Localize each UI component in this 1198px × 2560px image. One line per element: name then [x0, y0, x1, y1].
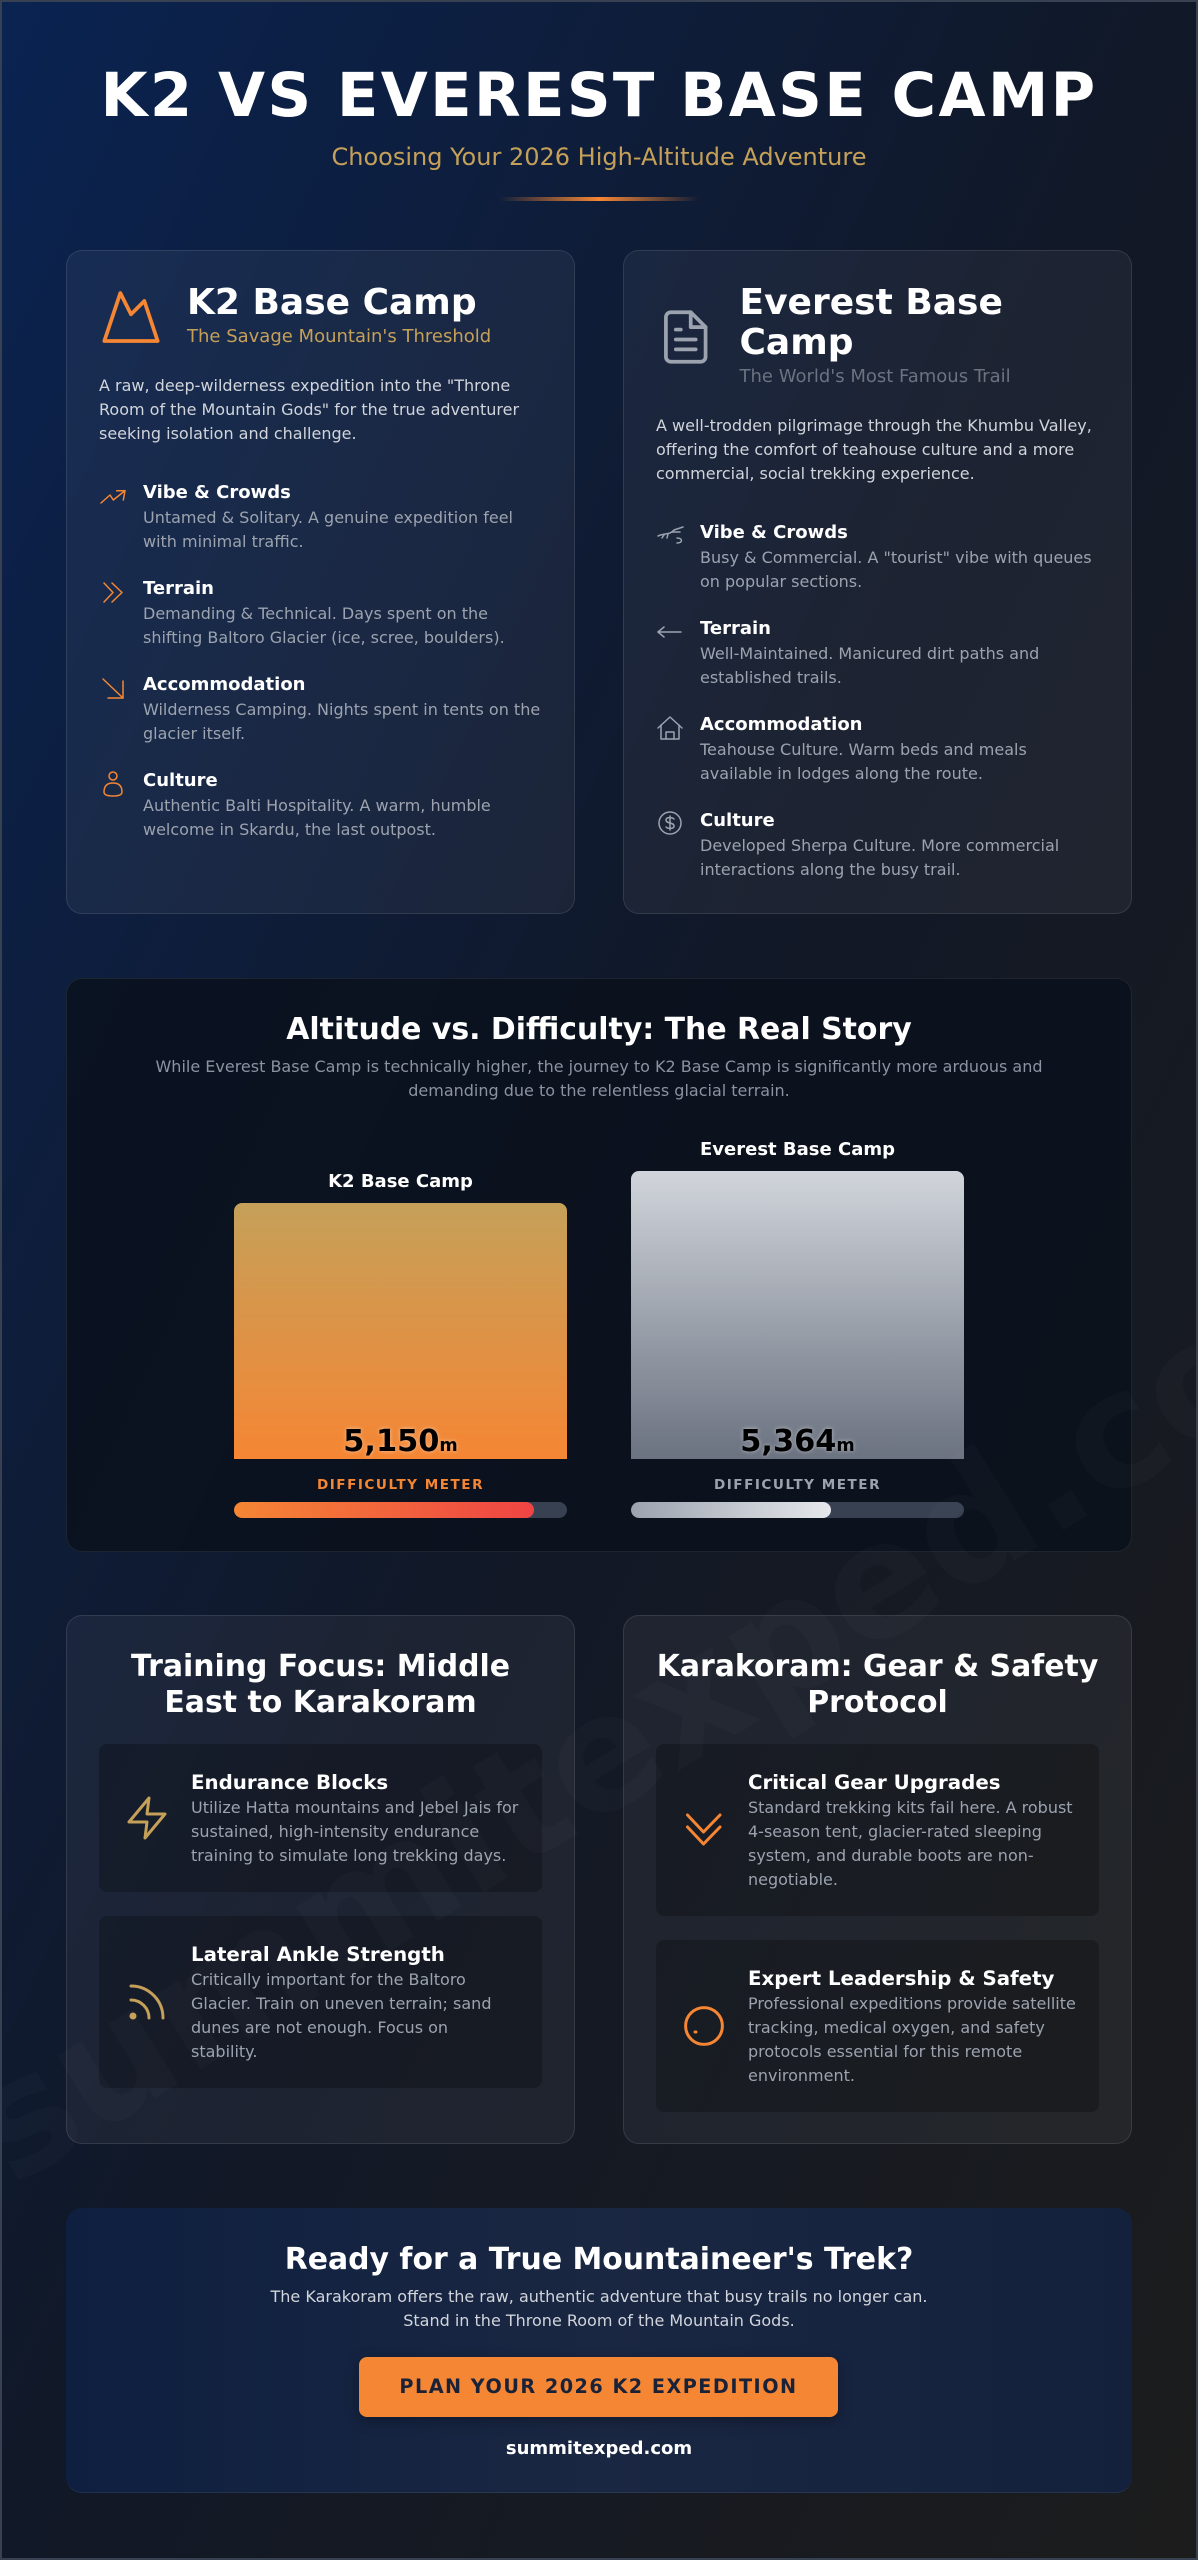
Everest card header — [664, 282, 1011, 387]
K2 item: culture — [103, 770, 491, 839]
icon: person — [103, 771, 123, 797]
Everest difficulty meter — [631, 1502, 964, 1518]
gear heading: Protocol — [807, 1684, 948, 1720]
K2 item: vibe and crowds: Vibe & Crowds — [143, 482, 291, 502]
K2 item: vibe and crowds: Untamed & Solitary. A genuine expedition feel with minimal traffic. — [143, 508, 513, 551]
icon: mountain — [102, 291, 160, 343]
panel: altitude vs difficulty — [66, 978, 1132, 1552]
Everest altitude value: 5,364m — [740, 1424, 855, 1459]
icon: house — [657, 716, 683, 740]
panel: K2 Base Camp card — [66, 250, 575, 914]
CTA button: PLAN YOUR 2026 K2 EXPEDITION — [399, 2375, 798, 2398]
chart: Everest altitude bar — [631, 1139, 964, 1518]
K2 difficulty label: DIFFICULTY METER — [317, 1476, 484, 1492]
icon: trending up — [100, 490, 126, 504]
CTA text: The Karakoram offers the raw, authentic adventure that busy trails no longer can. — [271, 2287, 927, 2306]
K2 bar — [234, 1203, 567, 1459]
panel: call to action — [66, 2208, 1132, 2493]
K2 item: vibe and crowds — [100, 482, 513, 551]
CTA heading: Ready for a True Mountaineer's Trek? — [285, 2242, 913, 2277]
section text: While Everest Base Camp is technically higher, the journey to K2 Base Camp is significantly more arduous and demanding due to the relentless glacial terrain. — [155, 1057, 1043, 1100]
block: leadership: Professional expeditions provide satellite tracking, medical oxygen, and safety protocols essential for this remote environment. — [748, 1994, 1076, 2085]
icon: circle with dot — [684, 2006, 724, 2046]
icon: document — [664, 310, 708, 364]
K2 item: accommodation: Wilderness Camping. Nights spent in tents on the glacier itself. — [143, 700, 540, 743]
block: endurance — [99, 1744, 542, 1892]
icon: dollar — [658, 811, 682, 835]
K2 item: terrain: Terrain — [143, 578, 214, 598]
Everest item: culture — [658, 810, 1059, 879]
block: ankle strength: stability. — [191, 2042, 257, 2061]
K2 item: accommodation — [102, 674, 540, 743]
header: title block — [100, 61, 1097, 201]
icon: arrow down right — [102, 678, 124, 699]
CTA text — [270, 2287, 927, 2330]
block: ankle strength — [99, 1916, 542, 2088]
panel: training focus — [66, 1615, 575, 2144]
icon: signal arcs — [130, 1984, 164, 2020]
website: summitexped.com — [506, 2438, 692, 2459]
gear heading — [657, 1648, 1098, 1720]
chart: K2 altitude bar — [234, 1171, 567, 1518]
K2 card header — [102, 282, 491, 347]
icon: double chevrons — [103, 582, 123, 603]
title: K2 VS EVEREST BASE CAMP — [100, 61, 1097, 131]
K2 bar label: K2 Base Camp — [328, 1171, 473, 1192]
Everest description: A well-trodden pilgrimage through the Khumbu Valley, offering the comfort of teahouse culture and a more commercial, social trekking experience. — [656, 416, 1092, 482]
block: endurance: Utilize Hatta mountains and Jebel Jais for sustained, high-intensity endurance training to simulate long trekking days. — [191, 1798, 518, 1865]
Everest item: accommodation — [657, 714, 1027, 783]
K2 item: culture: Culture — [143, 770, 218, 790]
Everest item: terrain: Well-Maintained. Manicured dirt paths and established trails. — [700, 644, 1039, 687]
block: endurance: Endurance Blocks — [191, 1770, 388, 1794]
block: leadership: Expert Leadership & Safety — [748, 1966, 1054, 1990]
K2 item: culture: Authentic Balti Hospitality. A warm, humble welcome in Skardu, the last outpost. — [143, 796, 491, 839]
K2 card title: The Savage Mountain's Threshold — [187, 326, 491, 347]
icon: lightning — [127, 1796, 167, 1840]
block: gear upgrades: Critical Gear Upgrades — [748, 1770, 1001, 1794]
subtitle: Choosing Your 2026 High-Altitude Adventure — [332, 143, 866, 171]
Everest card title: The World's Most Famous Trail — [740, 366, 1011, 387]
gear heading: Karakoram: Gear & Safety — [657, 1648, 1098, 1684]
K2 item: accommodation: Accommodation — [143, 674, 306, 694]
block: leadership — [656, 1940, 1099, 2112]
Everest item: accommodation: Teahouse Culture. Warm beds and meals available in lodges along the route. — [700, 740, 1027, 783]
icon: double chevron down — [686, 1813, 722, 1846]
CTA button — [359, 2357, 838, 2417]
panel: gear and safety — [623, 1615, 1132, 2144]
K2 card title: K2 Base Camp — [187, 282, 477, 323]
section heading: Altitude vs. Difficulty: The Real Story — [286, 1012, 912, 1046]
Everest difficulty label: DIFFICULTY METER — [714, 1476, 881, 1492]
CTA text: Stand in the Throne Room of the Mountain Gods. — [403, 2311, 795, 2330]
icon: bird — [657, 526, 684, 544]
Everest item: vibe and crowds: Busy & Commercial. A "tourist" vibe with queues on popular sections. — [700, 548, 1092, 591]
Everest item: culture: Culture — [700, 810, 775, 830]
K2 item: terrain: Demanding & Technical. Days spent on the shifting Baltoro Glacier (ice, scree, boulders). — [143, 604, 505, 647]
block: gear upgrades — [656, 1744, 1099, 1916]
K2 card title — [186, 282, 491, 347]
training heading — [131, 1648, 510, 1720]
block: ankle strength: Critically important for the Baltoro Glacier. Train on uneven terrain; sand dunes are not enough. Focus on — [191, 1970, 491, 2037]
Everest item: terrain — [657, 618, 1039, 687]
Everest item: culture: Developed Sherpa Culture. More commercial interactions along the busy trail. — [700, 836, 1059, 879]
title divider — [499, 197, 699, 201]
Everest item: accommodation: Accommodation — [700, 714, 863, 734]
K2 difficulty meter — [234, 1502, 567, 1518]
Everest bar label: Everest Base Camp — [700, 1139, 895, 1160]
Everest card title: Everest Base Camp — [740, 282, 1003, 363]
block: gear upgrades: Standard trekking kits fail here. A robust 4‑season tent, glacier-rated sleeping system, and durable boots are non-negotiable. — [748, 1798, 1073, 1889]
K2 altitude value: 5,150m — [343, 1424, 458, 1459]
Everest item: vibe and crowds: Vibe & Crowds — [700, 522, 848, 542]
Everest item: terrain: Terrain — [700, 618, 771, 638]
Everest bar — [631, 1171, 964, 1459]
training heading: Training Focus: Middle — [131, 1648, 510, 1684]
panel: Everest Base Camp card — [623, 250, 1132, 914]
Everest item: vibe and crowds — [657, 522, 1092, 591]
block: ankle strength: Lateral Ankle Strength — [191, 1942, 445, 1966]
K2 item: terrain — [103, 578, 505, 647]
K2 description: A raw, deep-wilderness expedition into the "Throne Room of the Mountain Gods" for the true adventurer seeking isolation and challenge. — [99, 376, 519, 443]
training heading: East to Karakoram — [164, 1684, 477, 1720]
icon: arrow left — [657, 626, 682, 638]
